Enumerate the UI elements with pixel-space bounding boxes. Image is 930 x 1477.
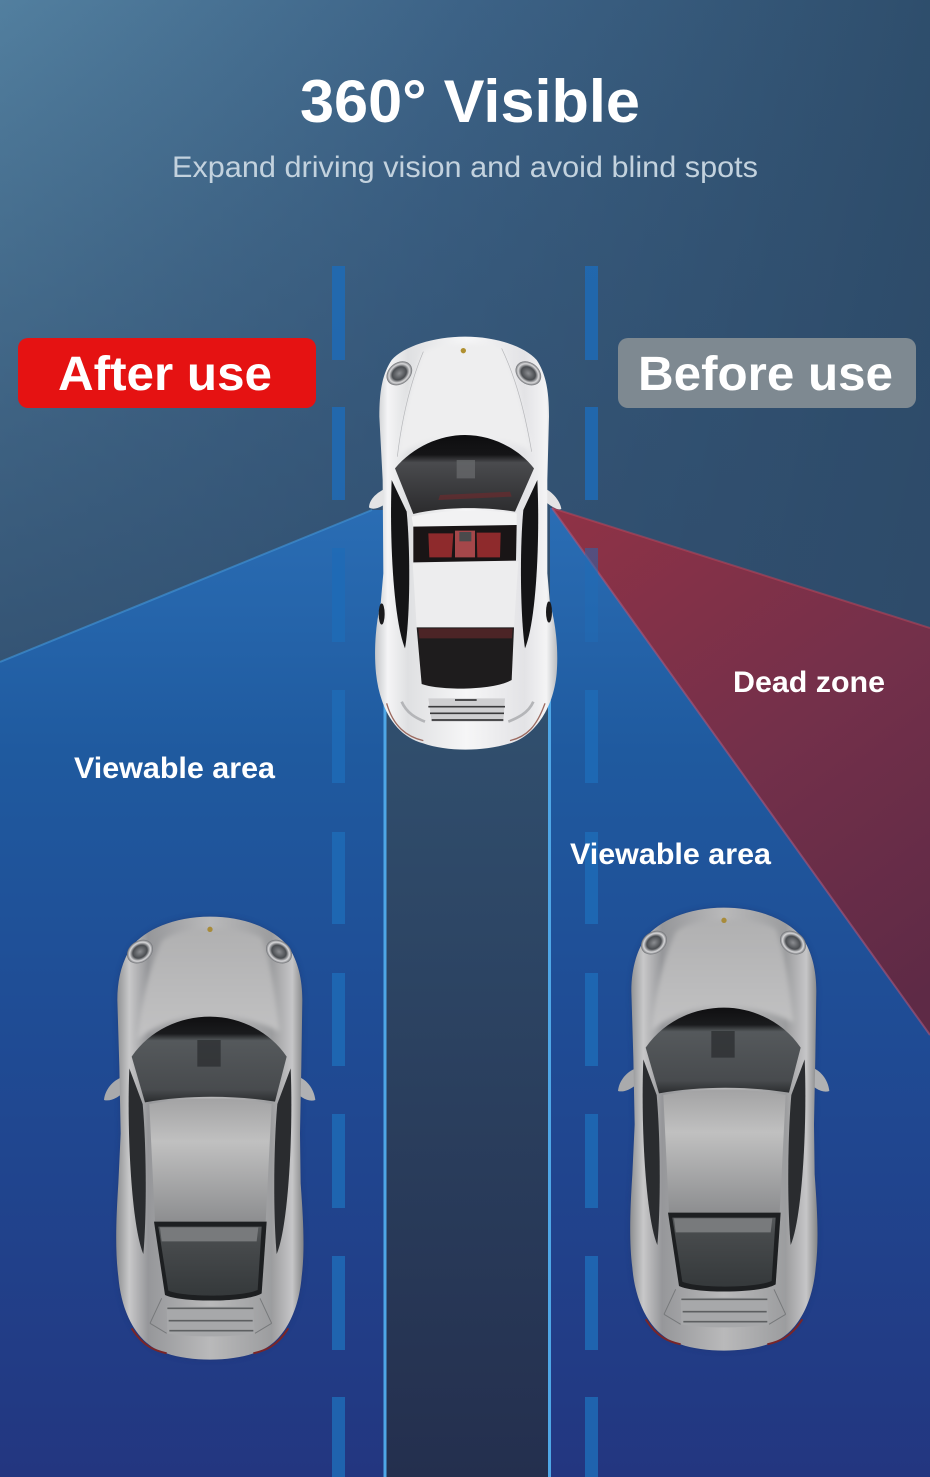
label: dead zone: Dead zone (733, 666, 885, 699)
badge: before use: Before use (638, 348, 893, 401)
silver car in right lane (618, 908, 829, 1351)
subtitle: Expand driving vision and avoid blind spots (172, 151, 758, 184)
left dashed lane line (332, 266, 345, 1477)
right viewable area wedge (550, 508, 930, 1477)
badge: before use (618, 338, 916, 408)
label: right viewable area: Viewable area (570, 838, 771, 871)
center lane road (386, 690, 550, 1477)
right dashed lane line (585, 266, 598, 1477)
wedge edge highlights (0, 508, 930, 1477)
title: 360° Visible (300, 68, 640, 135)
badge: after use (18, 338, 316, 408)
label: left viewable area: Viewable area (74, 752, 275, 785)
dead zone wedge (552, 508, 930, 1035)
silver car in left lane (104, 917, 315, 1360)
badge: after use: After use (58, 348, 272, 401)
left viewable area wedge (0, 510, 386, 1477)
white car in centre lane (369, 337, 561, 750)
